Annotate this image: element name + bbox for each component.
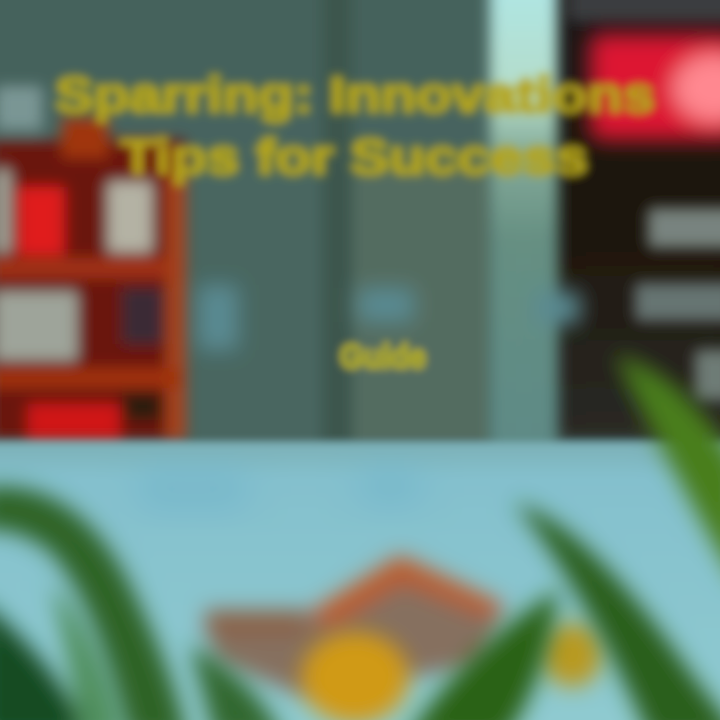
icon: red lamp: [590, 34, 720, 140]
counter soft patches: [140, 470, 420, 510]
yellow caption: Guide: [340, 338, 426, 376]
title: Sparring: Innovations: [55, 67, 655, 123]
icon: foreground plant left: [0, 486, 285, 720]
blue labels on wall: [198, 285, 580, 350]
wall panel divider: [322, 0, 352, 450]
light column: [490, 0, 558, 450]
icon: yellow fruit: [301, 623, 602, 720]
panel: light blue counter: [0, 442, 720, 720]
icon: orange house model: [205, 555, 505, 695]
title: [55, 67, 655, 185]
panel: left red shelf: [0, 86, 186, 440]
icon: foreground plant right: [405, 355, 720, 720]
title: Tips for Success: [120, 129, 588, 185]
panel: dark right cabinet: [560, 0, 720, 440]
right cabinet shelves: [635, 208, 720, 400]
